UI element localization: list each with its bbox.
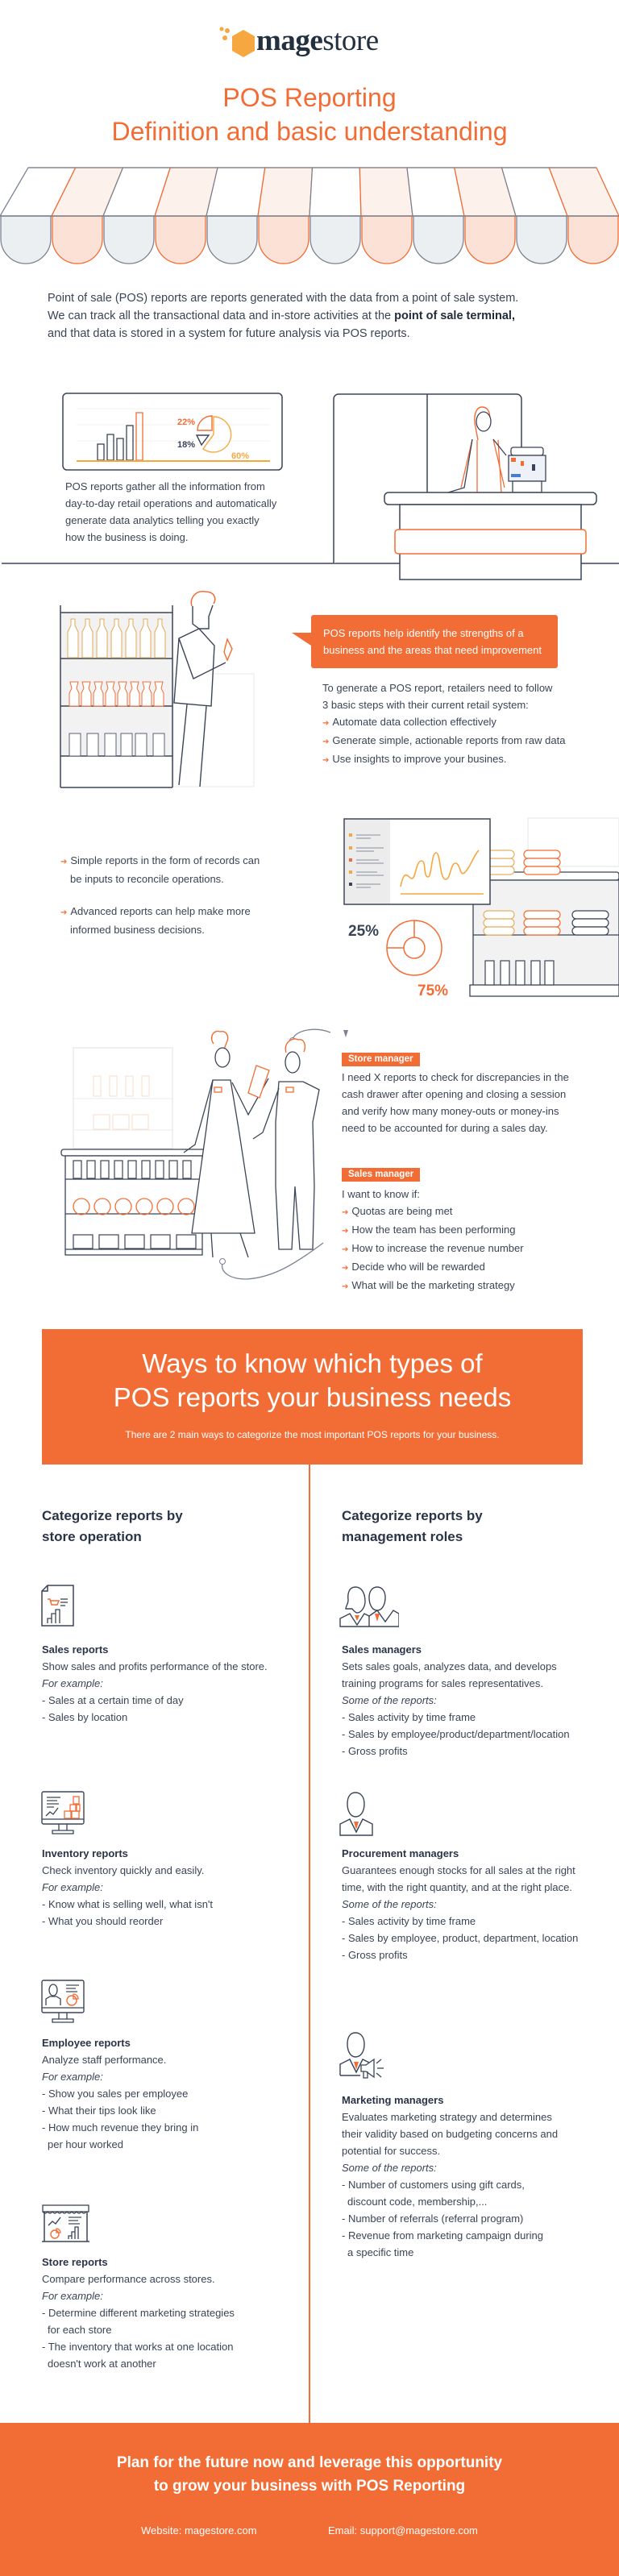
chart box illustration	[62, 393, 283, 471]
orange section banner: POS reports your business needs	[114, 1382, 511, 1412]
store manager: cash drawer after opening and closing a session	[342, 1088, 566, 1100]
text: procurement managers: time, with the right quantity, and at the right place.	[342, 1881, 572, 1893]
intro paragraph	[48, 292, 518, 340]
text: employee reports: - How much revenue they bring in	[42, 2121, 198, 2134]
text: sales managers: - Gross profits	[342, 1745, 408, 1757]
text: three steps: ➔ Automate data collection effectively	[322, 716, 496, 728]
text: sales managers: training programs for sales representatives.	[342, 1677, 543, 1689]
title: POS Reporting	[222, 83, 397, 112]
text: employee reports: Employee reports	[42, 2037, 131, 2049]
sales manager: Sales manager	[348, 1170, 413, 1179]
icon: procurement manager	[339, 1792, 373, 1836]
heading: management roles: management roles	[342, 1529, 463, 1544]
dashboard and shelves illustration	[343, 817, 619, 999]
text: sales reports: For example:	[42, 1677, 103, 1689]
sales manager: ➔ How to increase the revenue number	[342, 1242, 524, 1254]
text: store reports: Store reports	[42, 2256, 108, 2268]
text: marketing managers: their validity based on budgeting concerns and	[342, 2128, 558, 2140]
text: sales reports: - Sales at a certain time of day	[42, 1694, 184, 1706]
callout: strengths: business and the areas that need improvement	[323, 644, 542, 656]
store manager: I need X reports to check for discrepancies in the	[342, 1071, 569, 1083]
text: sales managers: - Sales activity by time frame	[342, 1711, 476, 1723]
intro paragraph: Point of sale (POS) reports are reports generated with the data from a point of sale system.	[48, 292, 518, 305]
text: POS reports gather: POS reports gather all the information from	[65, 480, 265, 492]
text: procurement managers: - Gross profits	[342, 1949, 408, 1961]
icon: employee monitor	[41, 1980, 85, 2023]
chart box illustration: 22%	[177, 418, 195, 427]
text: three steps: ➔ Generate simple, actionable reports from raw data	[322, 734, 565, 746]
text: sales managers: Some of the reports:	[342, 1694, 437, 1706]
text: marketing managers	[342, 2094, 558, 2258]
text: POS reports gather: generate data analytics telling you exactly	[65, 514, 260, 526]
sales manager	[342, 1168, 524, 1291]
sales manager: ➔ What will be the marketing strategy	[342, 1279, 515, 1291]
orange section banner: Ways to know which types of	[142, 1348, 483, 1378]
orange section banner: There are 2 main ways to categorize the most important POS reports for your business.	[125, 1429, 500, 1440]
text: simple & advanced reports: ➔ Advanced reports can help make more	[60, 905, 251, 917]
text: procurement managers: Some of the reports:	[342, 1898, 437, 1910]
chart box illustration: 60%	[231, 451, 249, 461]
sales manager: I want to know if:	[342, 1188, 420, 1200]
callout: strengths: POS reports help identify the strengths of a	[323, 627, 524, 639]
store manager: Store manager	[348, 1054, 413, 1064]
text: simple & advanced reports	[60, 854, 260, 936]
text: marketing managers: discount code, membership,...	[347, 2196, 487, 2208]
text: store reports: For example:	[42, 2290, 103, 2302]
store manager	[342, 1053, 569, 1134]
staff illustration	[60, 1028, 348, 1280]
heading: management roles	[342, 1508, 483, 1544]
text: simple & advanced reports: informed business decisions.	[70, 924, 205, 936]
dashboard and shelves illustration: 75%	[418, 983, 448, 999]
logo: magestore	[256, 24, 379, 57]
intro paragraph: We can track all the transactional data and in-store activities at the point of sale terminal,	[48, 310, 515, 322]
awning illustration	[0, 167, 619, 264]
store manager: need to be accounted for during a sales day.	[342, 1122, 548, 1134]
icon: sales report	[41, 1585, 74, 1627]
text: sales reports: Sales reports	[42, 1643, 108, 1656]
chart box illustration: 18%	[177, 440, 195, 450]
intro paragraph: and that data is stored in a system for future analysis via POS reports.	[48, 327, 410, 340]
text: employee reports: - What their tips look like	[42, 2104, 156, 2117]
text: sales reports	[42, 1643, 268, 1723]
divider line	[309, 1465, 310, 2423]
heading: store operation: Categorize reports by	[42, 1508, 183, 1523]
text: inventory reports: Inventory reports	[42, 1847, 128, 1859]
heading: management roles: Categorize reports by	[342, 1508, 483, 1523]
text: store reports: - Determine different marketing strategies	[42, 2307, 235, 2319]
text: procurement managers: Procurement managers	[342, 1847, 459, 1859]
footer	[0, 2423, 619, 2576]
text: store reports: doesn't work at another	[48, 2358, 156, 2370]
text: procurement managers: - Sales activity by time frame	[342, 1915, 476, 1927]
text: sales reports: - Sales by location	[42, 1711, 127, 1723]
sales manager: ➔ Quotas are being met	[342, 1205, 452, 1217]
text: three steps: ➔ Use insights to improve your busines.	[322, 753, 506, 765]
text: marketing managers: a specific time	[347, 2246, 413, 2258]
footer: to grow your business with POS Reporting	[154, 2478, 465, 2495]
sales manager: ➔ Decide who will be rewarded	[342, 1261, 485, 1273]
text: simple & advanced reports: ➔ Simple reports in the form of records can	[60, 854, 260, 866]
text: sales managers	[342, 1643, 570, 1757]
heading: store operation	[42, 1508, 183, 1544]
text: marketing managers: Marketing managers	[342, 2094, 443, 2106]
text: marketing managers: potential for success.	[342, 2145, 440, 2157]
text: three steps	[322, 682, 566, 765]
counter illustration	[2, 393, 619, 580]
dashboard and shelves illustration: 25%	[348, 923, 379, 940]
sales manager: ➔ How the team has been performing	[342, 1224, 515, 1236]
text: POS reports gather	[65, 480, 277, 543]
text: employee reports: Analyze staff performance.	[42, 2054, 166, 2066]
text: employee reports: per hour worked	[48, 2138, 123, 2150]
text: sales managers: Sales managers	[342, 1643, 422, 1656]
text: procurement managers: Guarantees enough stocks for all sales at the right	[342, 1864, 575, 1876]
heading: store operation: store operation	[42, 1529, 142, 1544]
text: procurement managers: - Sales by employee, product, department, location	[342, 1932, 578, 1944]
text: simple & advanced reports: be inputs to reconcile operations.	[70, 873, 224, 885]
text: store reports	[42, 2256, 235, 2370]
text: employee reports: - Show you sales per employee	[42, 2088, 188, 2100]
text: sales reports: Show sales and profits performance of the store.	[42, 1660, 268, 1672]
callout: strengths	[292, 615, 558, 668]
text: POS reports gather: how the business is doing.	[65, 531, 188, 543]
text: sales managers: Sets sales goals, analyzes data, and develops	[342, 1660, 557, 1672]
text: employee reports	[42, 2037, 198, 2150]
title	[111, 83, 508, 146]
store manager: and verify how many money-outs or money-ins	[342, 1105, 559, 1117]
text: inventory reports: Check inventory quickly and easily.	[42, 1864, 204, 1876]
icon: inventory monitor	[41, 1791, 85, 1834]
text: inventory reports: - What you should reorder	[42, 1915, 163, 1927]
orange section banner	[42, 1329, 583, 1465]
title: Definition and basic understanding	[111, 117, 508, 146]
footer: Email: support@magestore.com	[328, 2524, 478, 2537]
text: store reports: - The inventory that works at one location	[42, 2341, 234, 2353]
text: store reports: Compare performance across stores.	[42, 2273, 215, 2285]
text: three steps: To generate a POS report, retailers need to follow	[322, 682, 552, 694]
icon: marketing manager	[339, 2032, 384, 2079]
footer: Website: magestore.com	[141, 2524, 257, 2537]
text: inventory reports: For example:	[42, 1881, 103, 1893]
text: inventory reports	[42, 1847, 213, 1927]
text: store reports: for each store	[48, 2324, 111, 2336]
shelf and man illustration	[60, 591, 255, 788]
text: employee reports: For example:	[42, 2071, 103, 2083]
text: marketing managers: Evaluates marketing strategy and determines	[342, 2111, 552, 2123]
text: marketing managers: - Number of referrals (referral program)	[342, 2212, 523, 2225]
text: marketing managers: - Revenue from marketing campaign during	[342, 2229, 543, 2242]
text: procurement managers	[342, 1847, 578, 1961]
icon: store	[42, 2204, 89, 2242]
text: POS reports gather: day-to-day retail operations and automatically	[65, 497, 276, 509]
text: marketing managers: Some of the reports:	[342, 2162, 437, 2174]
text: three steps: 3 basic steps with their current retail system:	[322, 699, 529, 711]
text: marketing managers: - Number of customers using gift cards,	[342, 2179, 525, 2191]
icon: sales managers	[339, 1586, 399, 1627]
footer: Plan for the future now and leverage this opportunity	[117, 2454, 502, 2471]
text: sales managers: - Sales by employee/product/department/location	[342, 1728, 570, 1740]
text: inventory reports: - Know what is selling well, what isn't	[42, 1898, 213, 1910]
